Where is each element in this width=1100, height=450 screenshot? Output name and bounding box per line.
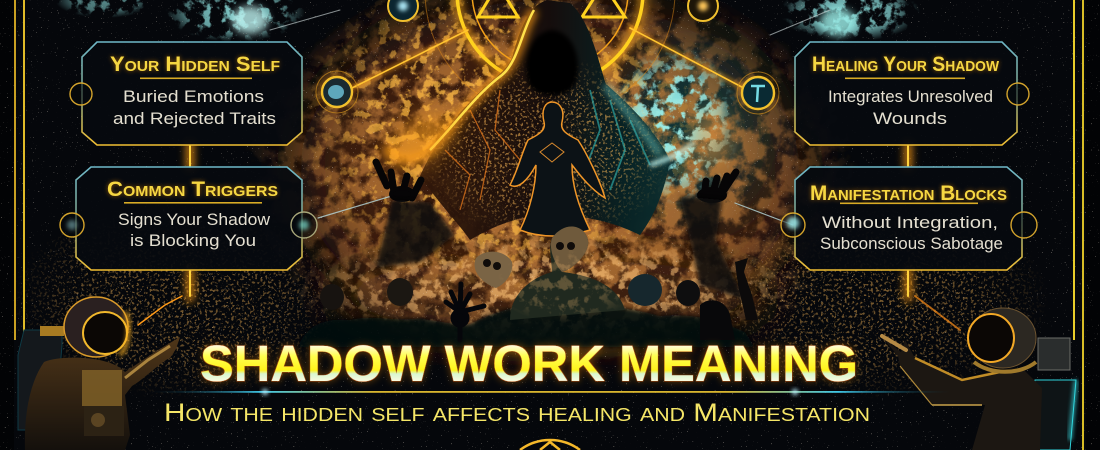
connectors: [190, 145, 908, 298]
panel: manifestation blocks: [795, 167, 1022, 270]
heading: Your Hidden Self: [110, 53, 280, 76]
pointing finger: [882, 336, 906, 350]
nebula: top far left wisp: [55, 0, 155, 18]
underline: [845, 78, 965, 79]
helmet: [970, 308, 1036, 368]
body text: Integrates Unresolved: [828, 87, 993, 106]
icon: healing orb: [737, 72, 779, 114]
title: SHADOW WORK MEANING: [200, 335, 858, 392]
left astronaut: [18, 297, 180, 450]
helmet: [64, 297, 128, 357]
hood opening: [526, 30, 578, 96]
energy lines to nodes: [138, 10, 960, 330]
underline: [840, 202, 978, 204]
bottom ornament: [520, 440, 580, 450]
nebula: right bright teal spot: [820, 8, 856, 36]
panel: common triggers: [76, 167, 302, 270]
crowd of shadow figures: [300, 226, 758, 347]
icon: hidden self orb: [316, 71, 358, 113]
visor: [968, 314, 1014, 362]
icon: top left node: [388, 0, 418, 21]
nebula: left bright teal spot: [232, 6, 268, 34]
icon: right triangle: [582, 0, 625, 17]
helmet collar: [974, 362, 1036, 372]
body text: Without Integration,: [822, 213, 998, 232]
nebula: teal clouds: [610, 45, 740, 205]
panel: healing your shadow: [795, 42, 1017, 145]
underline: [140, 78, 252, 79]
body text line 2: Wounds: [873, 109, 947, 128]
right astronaut: [881, 308, 1076, 450]
nebula: orange specks left: [10, 200, 350, 400]
body text line 2: is Blocking You: [130, 231, 256, 250]
divider: [150, 389, 950, 395]
nebula: lower dust cloud: [280, 233, 820, 343]
body text: Buried Emotions: [123, 87, 264, 106]
icon: left triangle: [478, 0, 518, 17]
inner meditating figure: [510, 102, 605, 236]
suit: [881, 336, 1042, 450]
heading: Manifestation Blocks: [810, 182, 1007, 205]
left glow cloud: [377, 102, 463, 178]
heading: Healing Your Shadow: [812, 53, 1000, 76]
panel: your hidden self: [82, 42, 302, 145]
raised hand: [446, 284, 484, 340]
arm highlight: [125, 346, 170, 378]
icon: ring glyphs: [67, 217, 799, 230]
sacred geometry ring: [425, 0, 675, 117]
left sleeve: [376, 200, 455, 268]
right frame lines: [1074, 0, 1083, 450]
right orange cloud: [692, 110, 732, 170]
underline: [124, 202, 262, 204]
nebula: bright orange filaments: [290, 0, 710, 300]
backpack: [1020, 380, 1076, 450]
left hand: [376, 162, 421, 200]
teal energy at right arm: [650, 142, 695, 165]
nebula: deep orange base: [240, 0, 860, 370]
body text line 2: and Rejected Traits: [113, 109, 276, 128]
head mid right: [676, 280, 700, 306]
body text line 2: Subconscious Sabotage: [820, 234, 1003, 253]
head left: [320, 284, 344, 310]
nebula: orange specks right: [710, 200, 1050, 400]
right sleeve: [680, 196, 745, 300]
nebula: top left teal wisp: [165, 0, 305, 42]
right hand: [699, 172, 736, 201]
zombie right head: [628, 274, 662, 306]
glowing left edge: [385, 10, 534, 158]
suit: [25, 337, 180, 450]
zombie centre figure: [510, 226, 625, 320]
nebula: top right teal wisp: [780, 0, 920, 42]
left frame lines: [15, 0, 24, 340]
heading: Common Triggers: [107, 178, 278, 201]
icon: top right node: [688, 0, 718, 21]
robe teal folds: [585, 90, 650, 190]
body text: Signs Your Shadow: [118, 210, 271, 229]
raised arm right: [735, 258, 758, 320]
icon: small rings on panels: [60, 83, 1037, 238]
robe orange cracks: [445, 90, 520, 210]
subtitle: How the hidden self affects healing and Manifestation: [164, 399, 870, 427]
zombie left head: [475, 252, 512, 288]
chest plate: [82, 370, 122, 406]
backpack: [18, 330, 62, 430]
zombie grain: [495, 247, 635, 323]
head right: [700, 300, 735, 340]
hooded shadow figure: [377, 0, 732, 245]
robe grain: [415, 55, 675, 245]
teal edge: [1070, 380, 1076, 440]
helmet glow: [120, 312, 128, 355]
head far left: [387, 278, 413, 306]
visor: [83, 312, 127, 354]
right teal glow: [605, 85, 660, 155]
